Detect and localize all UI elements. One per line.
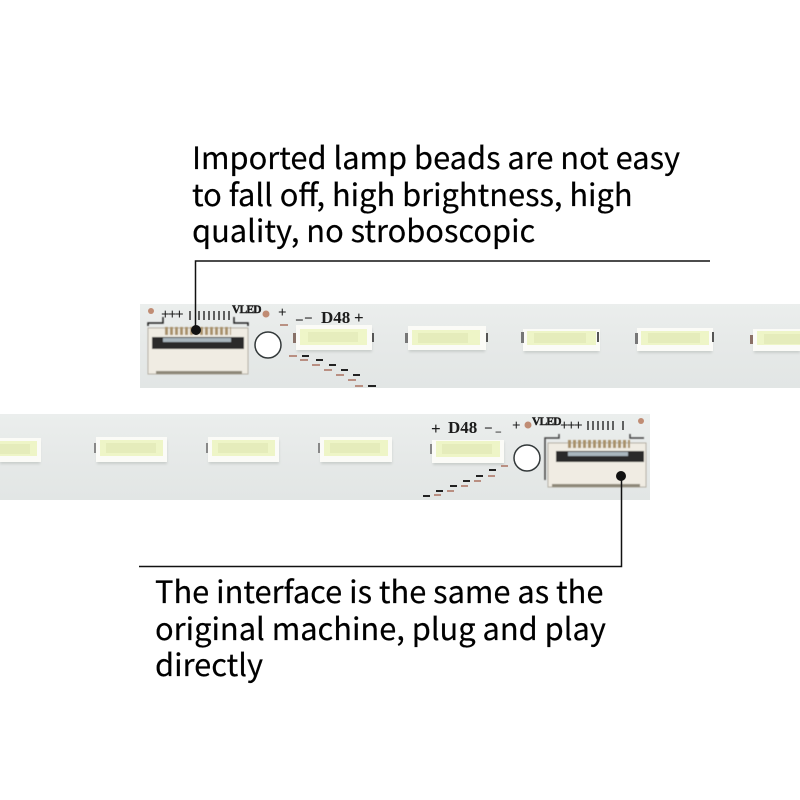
top callout text: quality, no stroboscopic bbox=[192, 206, 535, 251]
top callout text: to fall off, high brightness, high bbox=[192, 170, 633, 214]
bottom strip LED 2 bbox=[94, 437, 167, 464]
bottom LED strip bbox=[0, 414, 650, 500]
bottom strip LED 5 bbox=[430, 440, 504, 465]
bottom callout text: directly bbox=[155, 640, 263, 685]
bottom strip LED 1 bbox=[0, 438, 41, 464]
top strip VLED markings: + bbox=[278, 305, 287, 321]
bottom strip markings: VLED bbox=[532, 416, 561, 428]
bottom strip LED 4 bbox=[318, 437, 392, 464]
bottom callout leader line bbox=[139, 471, 626, 566]
top callout leader line bbox=[191, 261, 710, 335]
bottom callout text: original machine, plug and play bbox=[155, 604, 606, 648]
bottom strip connector bbox=[545, 434, 646, 487]
bottom strip LED 3 bbox=[206, 437, 279, 464]
top strip LED 3 bbox=[521, 329, 600, 353]
bottom strip markings bbox=[431, 416, 623, 439]
top strip VLED markings: D48 bbox=[321, 308, 350, 327]
top callout text: Imported lamp beads are not easy bbox=[192, 133, 680, 178]
top strip VLED markings: − bbox=[295, 313, 304, 329]
bottom strip markings: + bbox=[512, 418, 521, 434]
top strip VLED markings: +++ bbox=[161, 307, 183, 323]
top strip round hole bbox=[255, 332, 281, 358]
top strip LED 4 bbox=[635, 328, 714, 353]
top strip connector bbox=[148, 317, 248, 374]
bottom strip markings: − bbox=[495, 425, 502, 439]
bottom strip markings: + bbox=[431, 419, 441, 438]
bottom strip dashed trace bbox=[423, 470, 496, 496]
top strip LED 1 bbox=[293, 325, 374, 352]
top strip VLED markings: − bbox=[304, 311, 313, 327]
top callout text bbox=[192, 133, 680, 251]
top LED strip bbox=[140, 304, 800, 388]
top strip LED 5 bbox=[750, 329, 800, 353]
top strip dashed trace bbox=[289, 356, 363, 386]
bottom callout text: The interface is the same as the bbox=[155, 567, 603, 612]
top strip VLED markings bbox=[161, 304, 364, 329]
bottom strip round hole bbox=[514, 445, 540, 471]
top strip VLED markings: + bbox=[354, 308, 364, 327]
bottom strip markings: D48 bbox=[448, 418, 477, 437]
top strip VLED markings: VLED bbox=[232, 304, 261, 316]
bottom strip markings: +++ bbox=[560, 418, 582, 434]
top strip LED 2 bbox=[405, 326, 488, 352]
bottom callout text bbox=[155, 567, 606, 685]
bottom strip markings: − bbox=[484, 421, 493, 437]
